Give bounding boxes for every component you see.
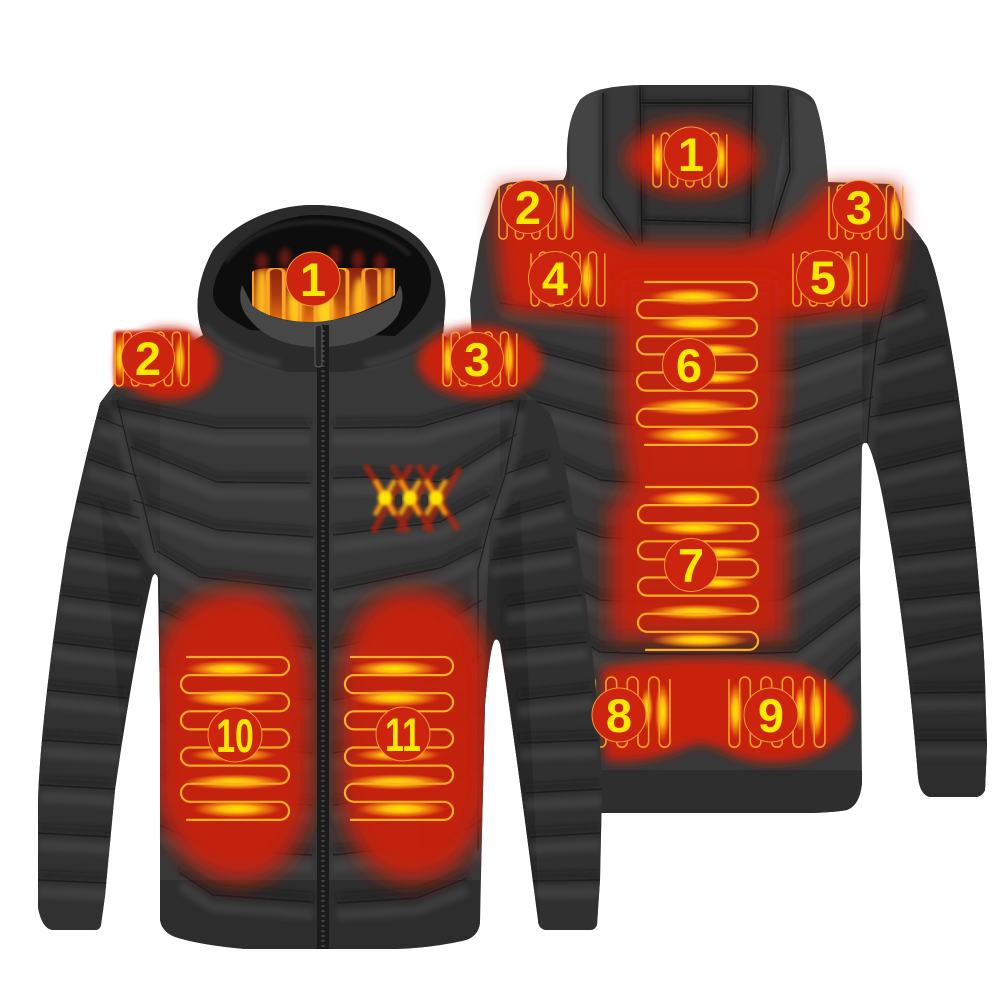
- back zone badge 2: 2: [515, 181, 541, 234]
- back comb heating element 2: [499, 185, 573, 239]
- hood collar: [240, 285, 403, 347]
- back zone badge 5: [796, 250, 850, 304]
- back zone badge 5: 5: [810, 251, 836, 304]
- hood outer shell: [198, 205, 445, 372]
- front zone badge 2: 2: [135, 332, 161, 385]
- back comb heating element 8: [574, 677, 670, 747]
- back zone badge 6: [662, 338, 716, 392]
- front heat glow: shoulder 3: [418, 326, 542, 398]
- front view jacket: [38, 205, 605, 950]
- back zone badge 7: 7: [678, 539, 704, 592]
- front zipper: [315, 325, 329, 949]
- back zone badge 8: [592, 688, 646, 742]
- back view jacket: [470, 85, 992, 815]
- front comb heating element 3: [442, 332, 517, 386]
- back zone badge 4: 4: [542, 252, 568, 305]
- hood opening: [213, 215, 431, 336]
- back zone badge 1: [664, 127, 718, 181]
- front zone badge 11: 11: [385, 709, 421, 761]
- front zone badge 1: [286, 252, 340, 306]
- zipper pull: [315, 325, 322, 367]
- back zone badge 7: [664, 538, 718, 592]
- back serpentine heating element 6: [637, 282, 757, 445]
- back zone badge 6: 6: [676, 339, 702, 392]
- front zone badge 3: [450, 332, 504, 386]
- back zone badge 3: 3: [846, 181, 872, 234]
- back heat glow: hood and shoulders: [496, 122, 902, 318]
- back comb heating element 9: [728, 677, 825, 747]
- front heat glow: lower panels: [155, 590, 490, 882]
- back zone badge 8: 8: [606, 689, 632, 742]
- back zone badge 1: 1: [678, 128, 704, 181]
- back heat glow: lower panels: [602, 658, 853, 762]
- back zone badge 3: [832, 180, 886, 234]
- hood: [198, 205, 445, 372]
- front heat glow: shoulder 2: [114, 328, 218, 400]
- front zone badge 1: 1: [300, 253, 326, 306]
- back serpentine heating element 7: [638, 487, 758, 650]
- front zone badge 3: 3: [464, 333, 490, 386]
- back comb heating element 3: [829, 185, 903, 239]
- front zone badge 10: [208, 708, 262, 762]
- back zone badge 9: 9: [758, 689, 784, 742]
- dim red glow above the collar: [256, 246, 386, 272]
- front comb heating element 2: [114, 332, 189, 386]
- front jacket quilting: [38, 395, 605, 950]
- back comb heating element 1: [652, 133, 727, 187]
- back jacket body: [470, 85, 987, 813]
- back comb heating element 4: [531, 252, 605, 306]
- back zone badge 2: [502, 180, 554, 234]
- back zone badge 9: [744, 688, 798, 742]
- front serpentine heating element 11: [345, 657, 453, 820]
- front serpentine heating element 10: [181, 657, 289, 820]
- hood rim highlight: [203, 325, 443, 364]
- front jacket body: [38, 205, 602, 949]
- front collar heating element 1: [252, 244, 395, 322]
- front zone badge 10: 10: [216, 710, 254, 762]
- front zone badge 2: [122, 332, 174, 385]
- back zone badge 4: [528, 252, 582, 305]
- back jacket quilting: [495, 85, 992, 815]
- front zone badge 11: [376, 707, 430, 761]
- back comb heating element 5: [793, 252, 867, 306]
- chest controller logo: [365, 465, 460, 532]
- back heat glow: centre spine: [610, 280, 786, 640]
